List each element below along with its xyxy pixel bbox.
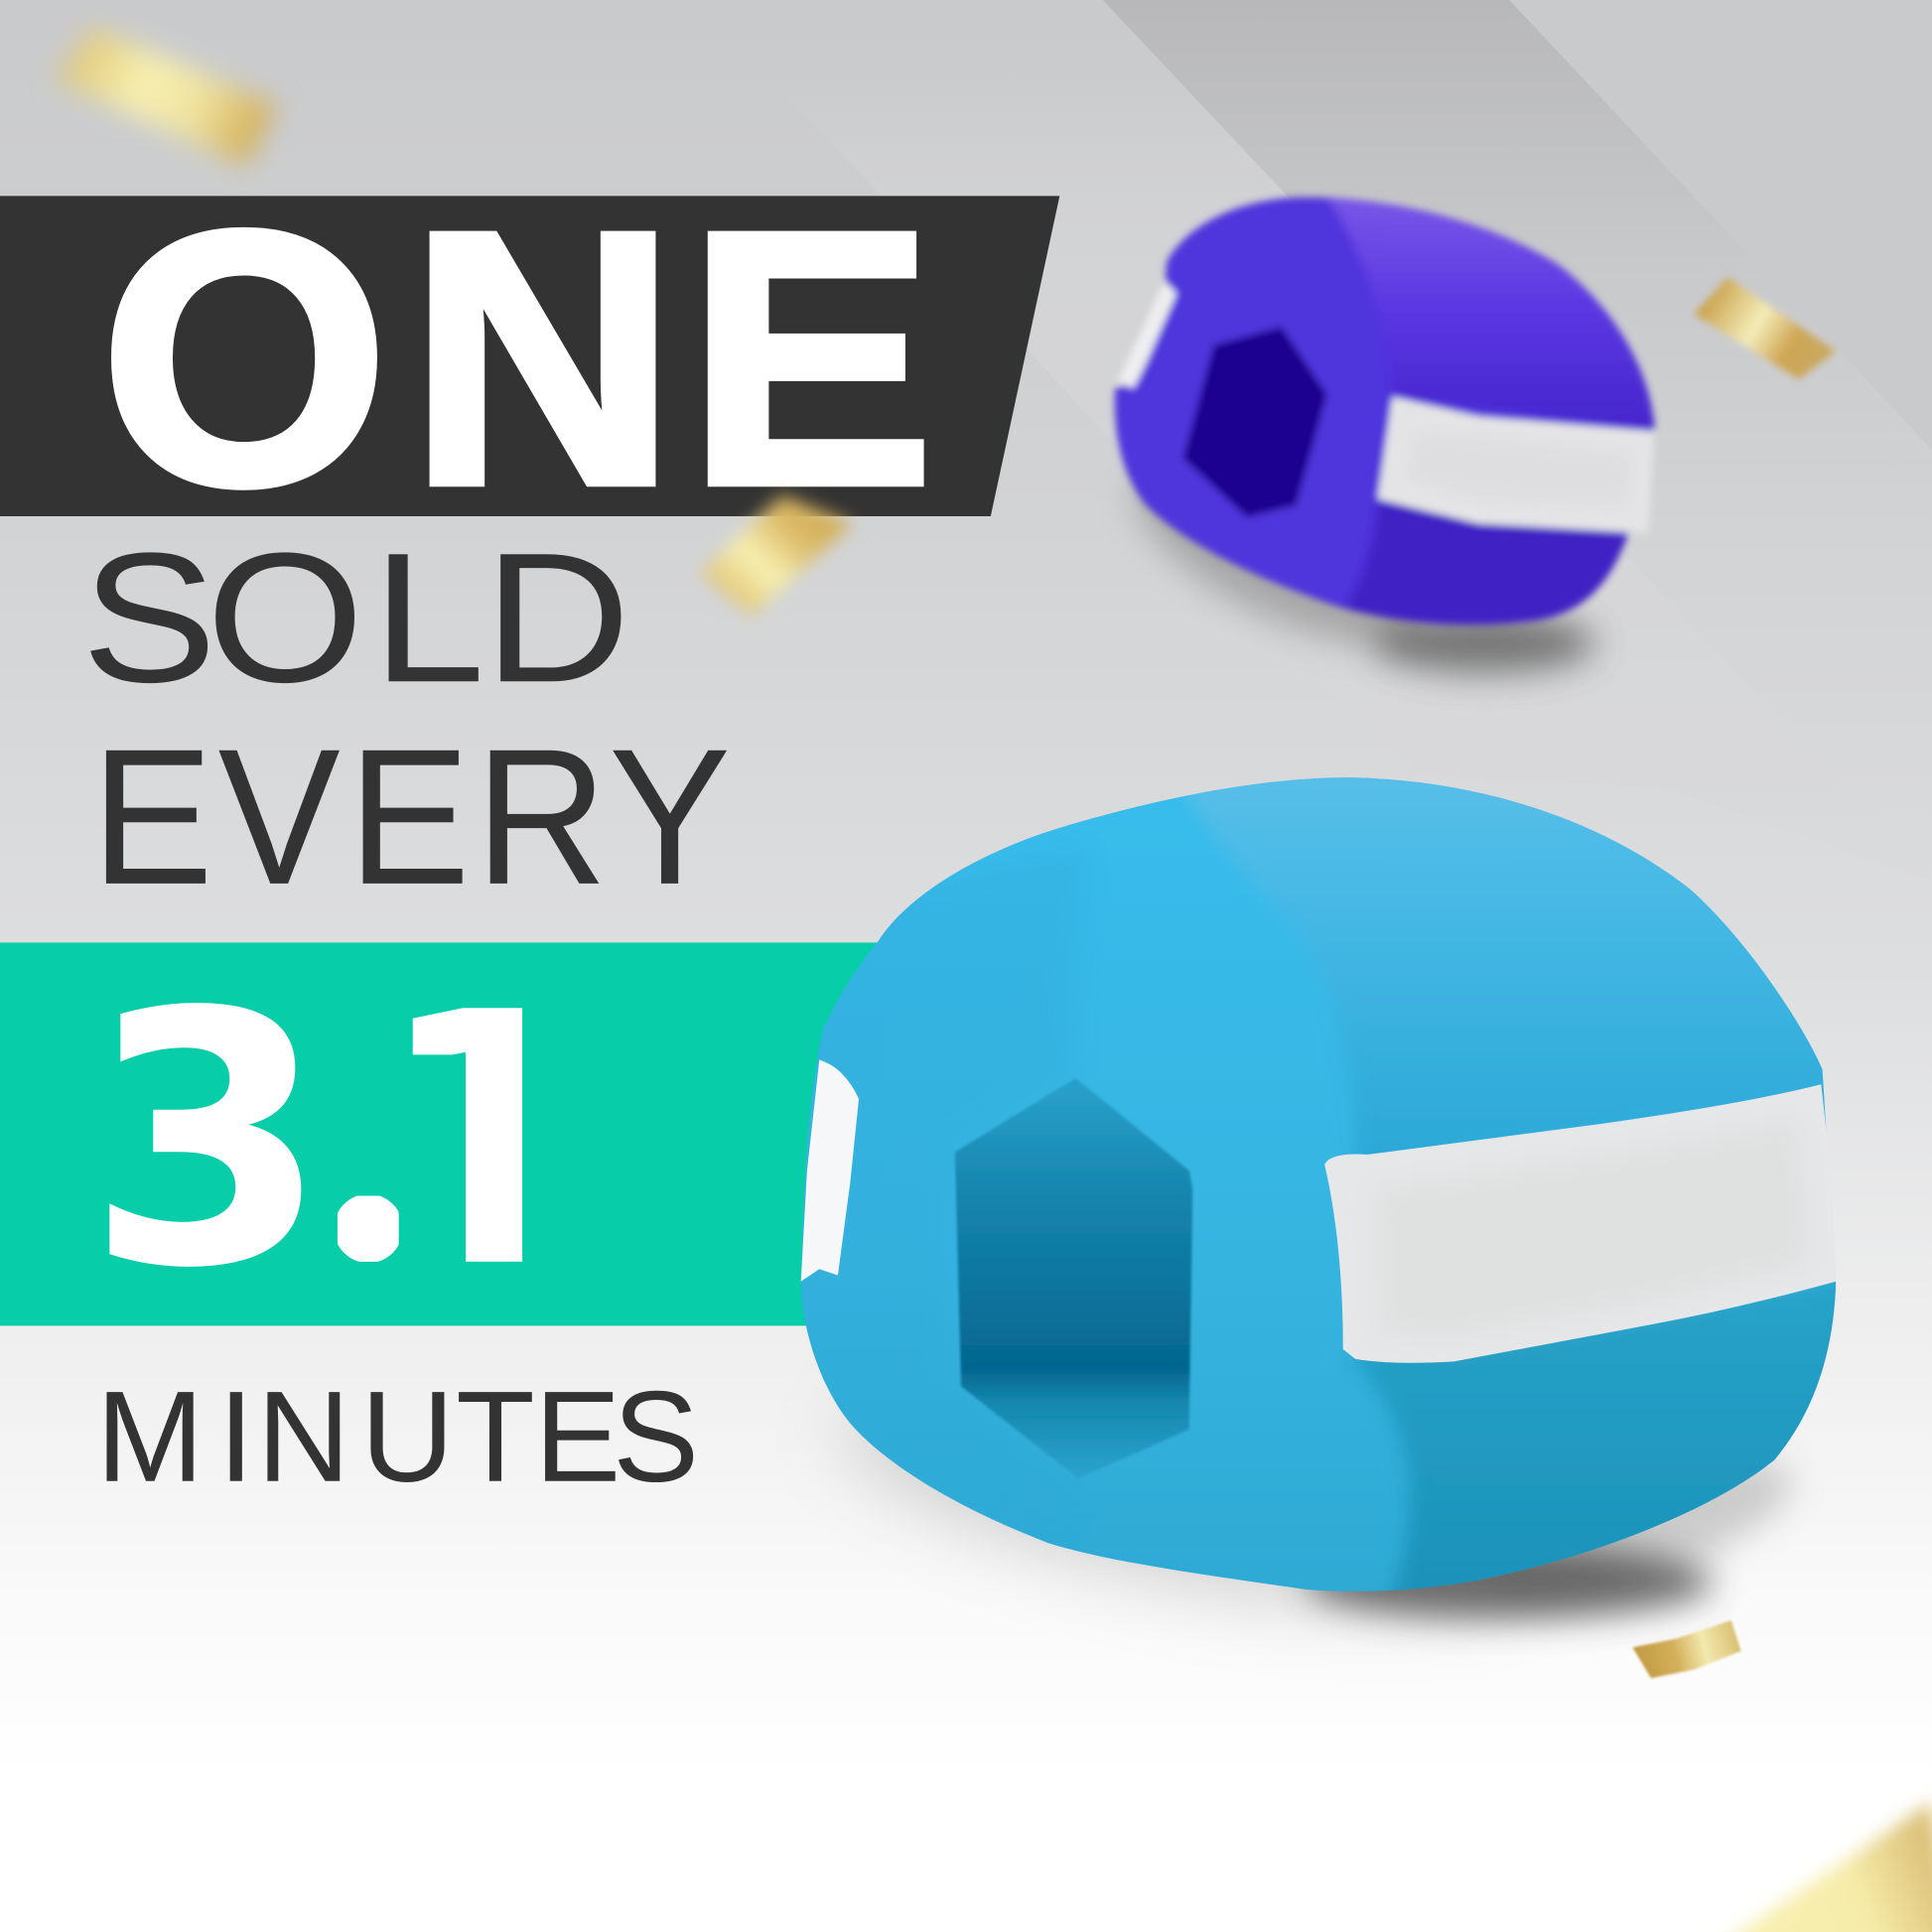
purple jaw trainer [1109, 185, 1676, 682]
purple body [1109, 185, 1676, 653]
confetti: bottom right corner [1701, 1801, 1932, 1932]
confetti: lower right [1632, 1620, 1741, 1678]
black banner [0, 196, 1059, 516]
shadow: purple [1111, 427, 1595, 682]
blue body [800, 777, 1837, 1591]
confetti: right [1694, 277, 1836, 379]
confetti: centre [700, 495, 853, 617]
blue jaw trainer [788, 740, 1872, 1653]
heading: ONE: ONE [99, 157, 934, 560]
blue hex opening [949, 1072, 1201, 1484]
number: 3.1: 3.1 [86, 938, 610, 1344]
text: SOLD: SOLD [81, 515, 630, 721]
shadow: blue [827, 1341, 1806, 1653]
blue left face shading [806, 888, 1037, 1539]
text: EVERY: EVERY [91, 709, 731, 925]
right clear band [1324, 1084, 1836, 1363]
text: MINUTES: MINUTES [96, 1364, 699, 1509]
green banner [0, 942, 899, 1325]
left clear tab [801, 1059, 859, 1282]
confetti: top left [56, 27, 277, 167]
blue lower face [1355, 1281, 1837, 1590]
blue top face [1182, 777, 1825, 1155]
